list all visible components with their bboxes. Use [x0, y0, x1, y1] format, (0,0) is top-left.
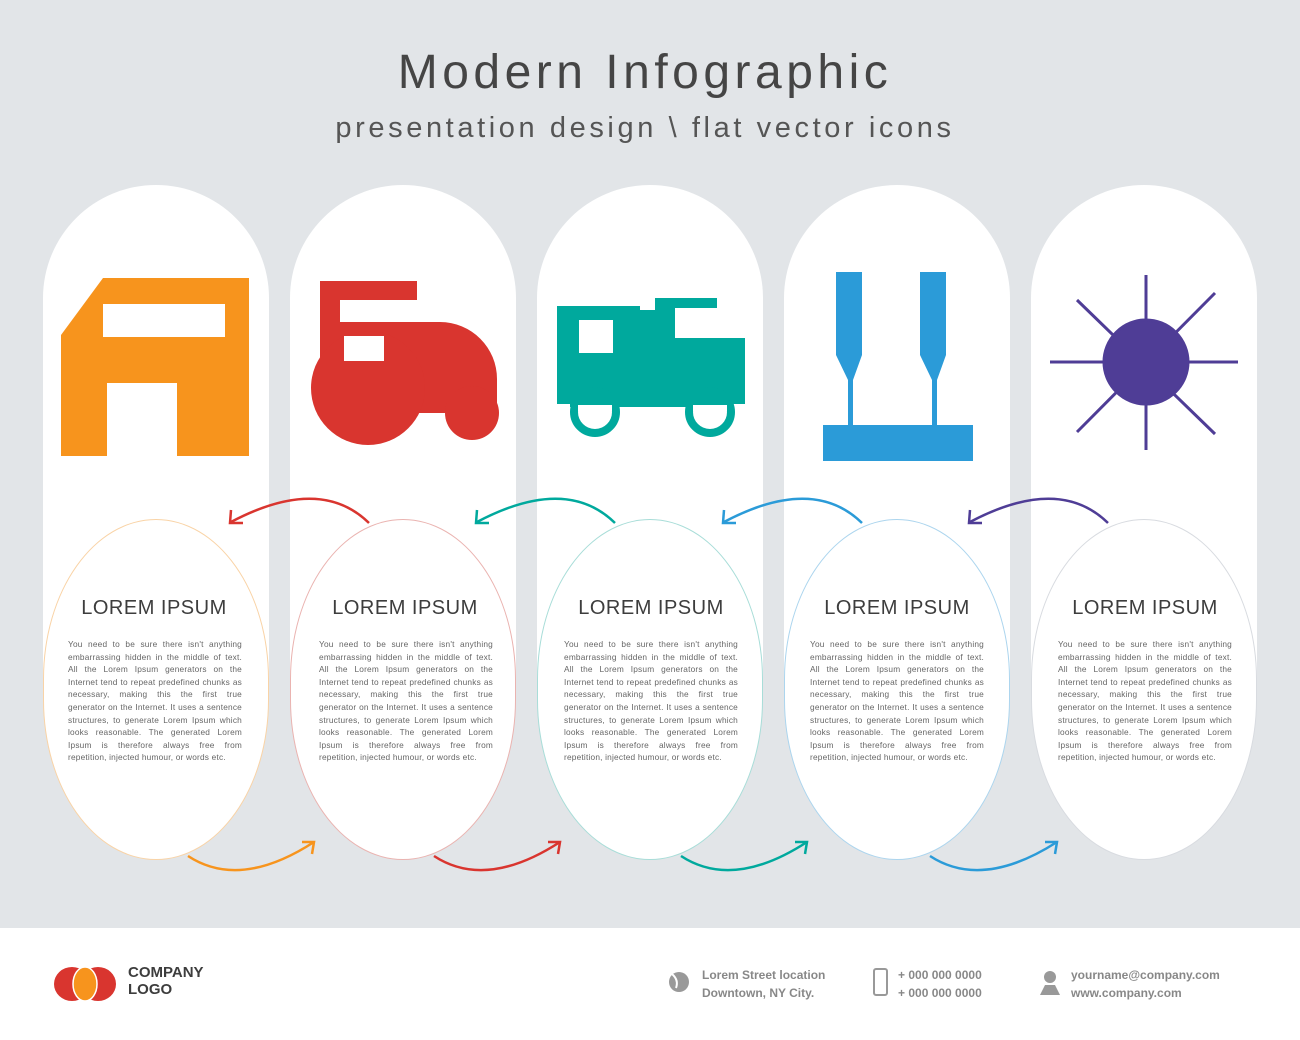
title: Modern Infographic — [398, 46, 892, 99]
phone — [873, 968, 982, 1000]
heading 4: LOREM IPSUM — [824, 597, 970, 619]
arrow: top 5 to 4 — [969, 499, 1108, 523]
company logo: LOGO — [128, 981, 172, 998]
email: www.company.com — [1071, 986, 1182, 1000]
text 5: You need to be sure there isn't anything embarrassing hidden in the middle of text. All the Lorem Ipsum generators on the Internet tend to repeat predefined chunks as necessary, making this the first true generator on the Internet. It uses a sentence structures, to generate Lorem Ipsum which looks reasonable. The generated Lorem Ipsum is therefore always free from repetition, injected humour, or words etc. — [1058, 639, 1232, 762]
icon: truck — [557, 298, 745, 433]
column 3 background — [537, 185, 763, 685]
column 5 background — [1031, 185, 1257, 685]
column 1 background — [43, 185, 269, 685]
arrow: bottom 1 to 2 — [188, 842, 314, 870]
arrow: top 3 to 2 — [476, 499, 615, 523]
oval 2 — [290, 519, 516, 860]
column 4 background — [784, 185, 1010, 685]
arrow: bottom 4 to 5 — [930, 842, 1057, 870]
icon: tuning forks — [823, 272, 973, 461]
phone: + 000 000 0000 — [898, 968, 982, 982]
text 4: You need to be sure there isn't anything embarrassing hidden in the middle of text. All the Lorem Ipsum generators on the Internet tend to repeat predefined chunks as necessary, making this the first true generator on the Internet. It uses a sentence structures, to generate Lorem Ipsum which looks reasonable. The generated Lorem Ipsum is therefore always free from repetition, injected humour, or words etc. — [810, 639, 984, 762]
icon: tractor — [311, 281, 499, 445]
oval 1 — [43, 519, 269, 860]
phone: + 000 000 0000 — [898, 986, 982, 1000]
arrow: top 2 to 1 — [230, 499, 369, 523]
subtitle: presentation design \ flat vector icons — [335, 112, 955, 144]
company logo: COMPANY — [128, 964, 204, 981]
address: Downtown, NY City. — [702, 986, 814, 1000]
heading 2: LOREM IPSUM — [332, 597, 478, 619]
icon: sun — [1050, 275, 1238, 450]
oval 4 — [784, 519, 1010, 860]
text 1: You need to be sure there isn't anything embarrassing hidden in the middle of text. All the Lorem Ipsum generators on the Internet tend to repeat predefined chunks as necessary, making this the first true generator on the Internet. It uses a sentence structures, to generate Lorem Ipsum which looks reasonable. The generated Lorem Ipsum is therefore always free from repetition, injected humour, or words etc. — [68, 639, 242, 762]
arrow: bottom 2 to 3 — [434, 842, 560, 870]
text 2: You need to be sure there isn't anything embarrassing hidden in the middle of text. All the Lorem Ipsum generators on the Internet tend to repeat predefined chunks as necessary, making this the first true generator on the Internet. It uses a sentence structures, to generate Lorem Ipsum which looks reasonable. The generated Lorem Ipsum is therefore always free from repetition, injected humour, or words etc. — [319, 639, 493, 762]
email — [1040, 968, 1220, 1000]
heading 3: LOREM IPSUM — [578, 597, 724, 619]
icon: garage — [61, 278, 249, 456]
oval 5 — [1031, 519, 1257, 860]
arrow: bottom 3 to 4 — [681, 842, 807, 870]
address — [669, 968, 825, 1000]
company logo — [54, 964, 204, 1001]
address: Lorem Street location — [702, 968, 825, 982]
column 2 background — [290, 185, 516, 685]
heading 1: LOREM IPSUM — [81, 597, 227, 619]
email: yourname@company.com — [1071, 968, 1220, 982]
footer — [0, 928, 1300, 1040]
text 3: You need to be sure there isn't anything embarrassing hidden in the middle of text. All the Lorem Ipsum generators on the Internet tend to repeat predefined chunks as necessary, making this the first true generator on the Internet. It uses a sentence structures, to generate Lorem Ipsum which looks reasonable. The generated Lorem Ipsum is therefore always free from repetition, injected humour, or words etc. — [564, 639, 738, 762]
heading 5: LOREM IPSUM — [1072, 597, 1218, 619]
oval 3 — [537, 519, 763, 860]
arrow: top 4 to 3 — [723, 499, 862, 523]
